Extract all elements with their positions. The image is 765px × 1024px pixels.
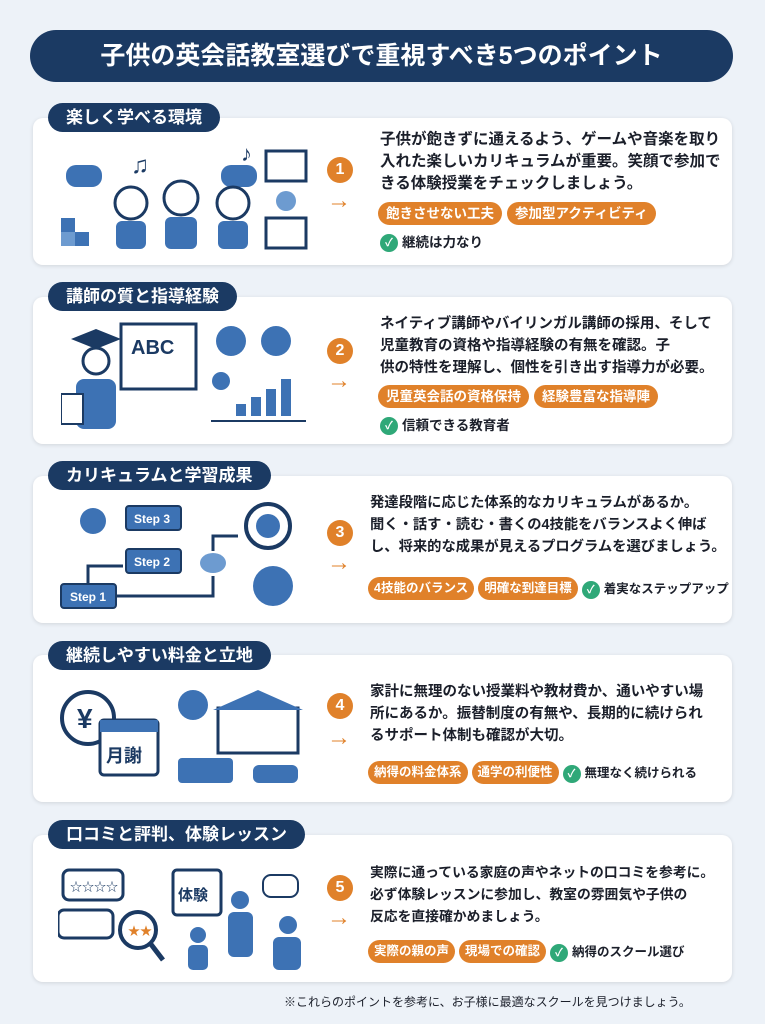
- check: [380, 417, 510, 435]
- number 3: 3: [336, 524, 344, 541]
- text: 必ず体験レッスンに参加し、教室の雰囲気や子供の: [370, 887, 687, 902]
- footnote: ※これらのポイントを参考に、お子様に最適なスクールを見つけましょう。: [284, 995, 691, 1009]
- illustration: reviews: 体験: [178, 887, 208, 904]
- text: [370, 865, 714, 924]
- text: 供の特性を理解し、個性を引き出す指導力が必要。: [380, 360, 714, 376]
- title: [30, 30, 733, 82]
- tags: [378, 202, 656, 225]
- text: 入れた楽しいカリキュラムが重要。笑顔で参加で: [380, 153, 721, 170]
- check: ✓: [385, 420, 393, 432]
- illustration: fees and location: ¥: [77, 703, 93, 734]
- illustration: teacher: ABC: [131, 337, 174, 359]
- text: [380, 130, 721, 192]
- illustration: kids: ♫: [131, 152, 149, 179]
- panel: 3: [33, 476, 732, 623]
- tab 5: [48, 820, 305, 849]
- tags + check: 無理なく続けられる: [585, 766, 697, 780]
- tab 2: [48, 282, 237, 311]
- illustration: reviews: ★★: [128, 924, 152, 938]
- tags + check: 明確な到達目標: [484, 581, 572, 595]
- illustration: fees and location: 月謝: [106, 746, 142, 766]
- tags + check: 着実なステップアップ: [604, 582, 729, 596]
- panel: 2: [33, 297, 732, 444]
- tags + check: [368, 761, 697, 784]
- arrow: →: [327, 724, 351, 751]
- tags + check: 納得の料金体系: [374, 765, 462, 779]
- text: 児童教育の資格や指導経験の有無を確認。子: [380, 338, 670, 354]
- number 1: 1: [336, 161, 344, 178]
- text: [380, 315, 714, 376]
- panel: 1: [33, 118, 732, 265]
- text: [370, 683, 703, 744]
- tags + check: ✓: [587, 584, 595, 596]
- tags + check: [368, 577, 729, 600]
- text: 発達段階に応じた体系的なカリキュラムがあるか。: [370, 495, 698, 511]
- tags: [378, 385, 658, 408]
- number 5: [327, 875, 353, 901]
- arrow: →: [327, 187, 351, 214]
- illustration: fees and location: [60, 690, 303, 783]
- check: 継続は力なり: [402, 235, 483, 250]
- check: 信頼できる教育者: [402, 418, 510, 433]
- tags + check: 現場での確認: [465, 944, 540, 958]
- tab 3: [48, 461, 270, 490]
- text: 家計に無理のない授業料や教材費か、通いやすい場: [370, 684, 703, 700]
- arrow: →: [327, 904, 351, 931]
- tags + check: ✓: [555, 947, 563, 959]
- text: ネイティブ講師やバイリンガル講師の採用、そして: [380, 316, 712, 332]
- illustration: reviews: ☆☆☆☆: [70, 880, 118, 894]
- tags + check: 納得のスクール選び: [572, 945, 685, 959]
- text: 実際に通っている家庭の声やネットの口コミを参考に。: [370, 865, 714, 880]
- number 2: 2: [336, 342, 344, 359]
- illustration: teacher: [61, 322, 306, 429]
- tab 2: 講師の質と指導経験: [66, 287, 219, 306]
- number 4: 4: [336, 697, 344, 714]
- tags: 経験豊富な指導陣: [542, 389, 650, 404]
- tags + check: [368, 940, 685, 963]
- tab 3: カリキュラムと学習成果: [66, 466, 252, 485]
- title: 子供の英会話教室選びで重視すべき5つのポイント: [100, 42, 663, 70]
- tab 1: 楽しく学べる環境: [66, 108, 202, 127]
- tab 4: [48, 641, 271, 670]
- tags: 児童英会話の資格保持: [386, 389, 521, 404]
- tags: 飽きさせない工夫: [386, 206, 494, 221]
- panel: 5: [33, 835, 732, 982]
- tab 1: [48, 103, 220, 132]
- illustration: steps: Step 1: [70, 590, 106, 604]
- text: [370, 494, 726, 555]
- tags + check: ✓: [568, 768, 576, 780]
- tab 4: 継続しやすい料金と立地: [66, 646, 253, 665]
- illustration: steps: Step 3: [134, 512, 170, 526]
- check: ✓: [385, 237, 393, 249]
- number 2: [327, 338, 353, 364]
- number 3: [327, 520, 353, 546]
- number 4: [327, 693, 353, 719]
- text: し、将来的な成果が見えるプログラムを選びましょう。: [370, 539, 726, 555]
- tags + check: 通学の利便性: [478, 765, 553, 779]
- text: るサポート体制も確認が大切。: [370, 728, 573, 744]
- number 5: 5: [336, 879, 344, 896]
- illustration: kids: [61, 143, 308, 250]
- tab 5: 口コミと評判、体験レッスン: [66, 825, 287, 844]
- tags + check: 実際の親の声: [374, 944, 449, 958]
- tags + check: 4技能のバランス: [374, 581, 468, 595]
- arrow: →: [327, 549, 351, 576]
- check: [380, 234, 483, 252]
- tags: 参加型アクティビティ: [515, 206, 648, 221]
- illustration: steps: [60, 502, 293, 609]
- arrow: →: [327, 367, 351, 394]
- text: 子供が飽きずに通えるよう、ゲームや音楽を取り: [380, 131, 720, 148]
- number 1: [327, 157, 353, 183]
- panel: 4: [33, 655, 732, 802]
- text: 所にあるか。振替制度の有無や、長期的に続けられ: [370, 706, 703, 722]
- text: 聞く・話す・読む・書くの4技能をバランスよく伸ば: [370, 517, 706, 533]
- text: 反応を直接確かめましょう。: [370, 909, 549, 924]
- text: きる体験授業をチェックしましょう。: [380, 175, 642, 192]
- illustration: steps: Step 2: [134, 555, 170, 569]
- illustration: reviews: [58, 868, 301, 970]
